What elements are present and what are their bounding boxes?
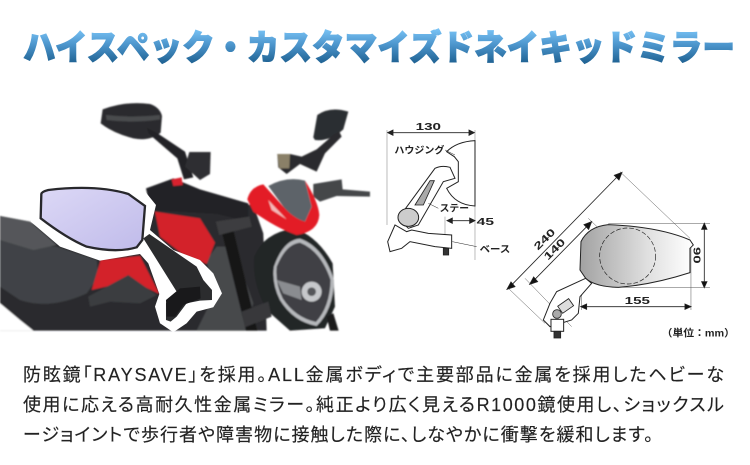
clear background below handlebar gap	[0, 303, 33, 331]
fairing red	[247, 181, 319, 235]
dimension 140: 140	[542, 237, 568, 263]
left reservoir	[185, 152, 211, 180]
label: base: ベース	[480, 245, 510, 256]
right mirror stem	[277, 132, 342, 174]
headlight inner	[276, 243, 331, 322]
photo: motorcycle with mirrors	[0, 103, 370, 332]
base bolt	[553, 310, 561, 318]
description text	[23, 365, 724, 445]
mirror base block	[166, 287, 201, 317]
headlight shroud	[254, 228, 335, 331]
left mirror housing	[101, 103, 162, 139]
windscreen	[268, 179, 312, 222]
text line 2: 使用に応える高耐久性金属ミラー。純正より広く見えるR1000鏡使用し、ショックスル	[23, 395, 724, 415]
lower right fork	[327, 313, 339, 331]
rear seat	[0, 216, 57, 250]
dimension 155: 155	[625, 296, 650, 307]
frame backdrop	[0, 198, 267, 331]
headlight lens	[302, 282, 322, 302]
red lever tip	[172, 177, 183, 186]
mirror glass	[41, 188, 145, 250]
dimension 90	[690, 223, 707, 288]
unit note: （単位：mm）	[662, 327, 735, 340]
label: housing: ハウジング	[394, 144, 445, 156]
joint	[398, 208, 419, 226]
tank	[155, 212, 215, 264]
base body	[388, 225, 452, 252]
dimension 240	[507, 172, 622, 289]
dimension 140	[530, 222, 592, 284]
right lever	[313, 179, 370, 202]
diagram: side view	[387, 122, 510, 260]
bolt	[443, 248, 449, 255]
housing	[447, 141, 475, 206]
left mirror stem	[147, 127, 193, 179]
mirror stem	[143, 234, 212, 322]
mirror cutout white outline	[31, 182, 222, 332]
dimension 45: 45	[477, 217, 494, 228]
stay	[543, 278, 592, 327]
handlebar	[146, 178, 248, 222]
fork strap	[242, 302, 272, 327]
fork	[222, 229, 257, 331]
stay arm	[398, 166, 455, 228]
headlight ring	[273, 239, 334, 326]
diagram: front view	[507, 172, 735, 340]
label: stay: ステー	[440, 204, 469, 215]
dimension 155	[581, 296, 691, 309]
dimension 90: 90	[690, 247, 701, 264]
dimension 130: 130	[416, 122, 441, 133]
frame centre grey	[197, 247, 253, 331]
side cover	[88, 275, 157, 307]
lower tank red	[92, 256, 159, 294]
text line 3: ージョイントで歩行者や障害物に接触した際に、しなやかに衝撃を緩和します。	[23, 425, 653, 445]
motorcycle body	[0, 103, 370, 331]
right mirror housing	[313, 109, 348, 140]
text line 1: 防眩鏡「RAYSAVE」を採用。ALL金属ボディで主要部品に金属を採用したヘビーな	[23, 365, 724, 385]
extension lines	[508, 172, 710, 327]
fork clamp	[216, 217, 252, 235]
mirror body	[580, 225, 693, 287]
dimension 240: 240	[532, 227, 558, 253]
glass circle	[600, 228, 656, 284]
extension lines	[387, 130, 475, 260]
seat	[0, 240, 98, 304]
